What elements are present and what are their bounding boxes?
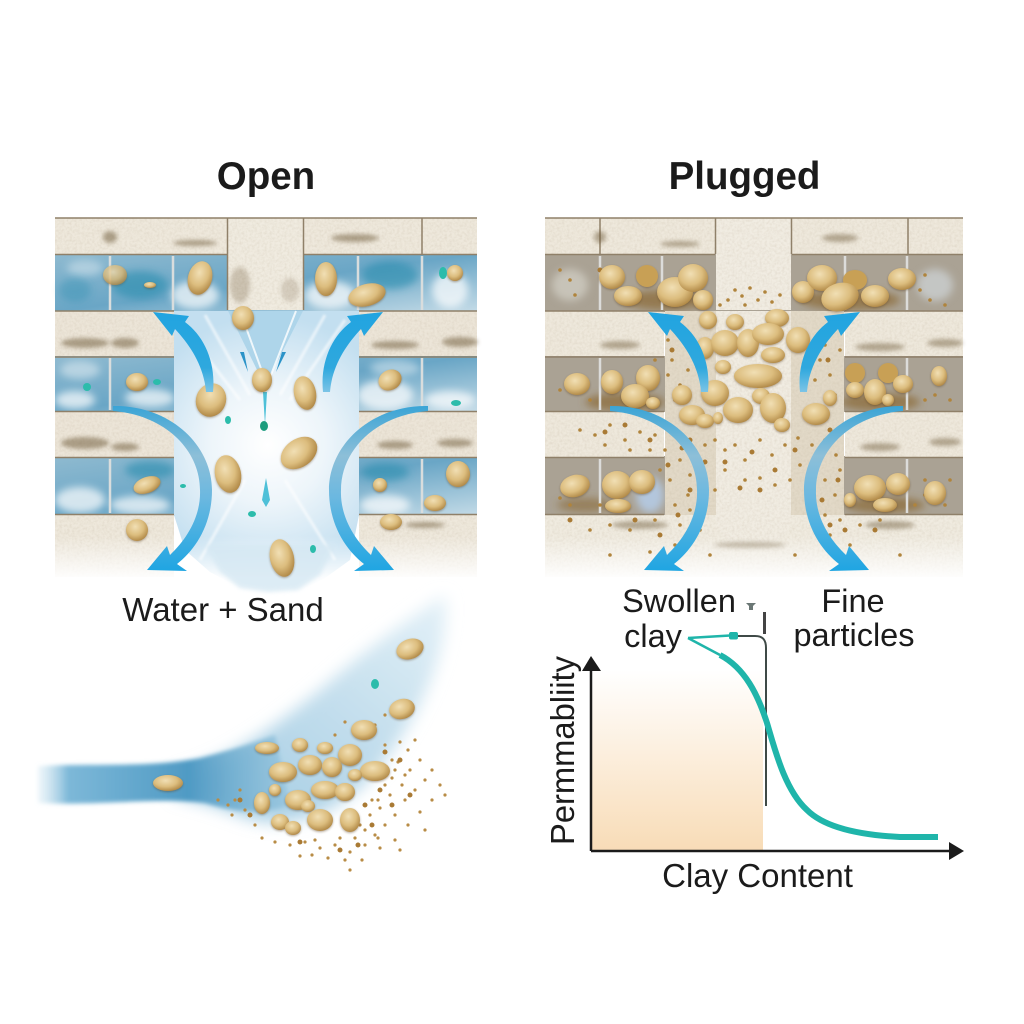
arrow: lower right flow: [804, 406, 903, 571]
arrow: upper left flow: [648, 312, 708, 392]
x axis label: Clay Content: [662, 857, 853, 894]
coarse sand spray: [240, 752, 410, 850]
arrow: upper right flow: [323, 312, 383, 392]
coarser particles: [570, 270, 875, 535]
title: Open: Open: [217, 155, 315, 198]
permeability curve: [720, 655, 938, 837]
bottom fade: [40, 536, 490, 592]
central flow streaks: [178, 311, 345, 560]
stone stains: [61, 231, 478, 528]
label: Fine particles: particles: [793, 617, 915, 653]
central open channel: [174, 311, 359, 592]
panel: open pore network: [40, 218, 490, 592]
label: Swollen clay: Swollen: [622, 583, 736, 619]
pore windows with water: [55, 254, 477, 516]
water stream: [38, 735, 290, 811]
axes: [591, 668, 950, 851]
label: Swollen clay: clay: [624, 618, 683, 654]
sand grains: [153, 635, 427, 835]
stone bricks: [55, 218, 477, 577]
arrow: lower left flow: [113, 406, 212, 571]
arrow: upper right flow: [800, 312, 860, 392]
teal mineral fragments: [83, 267, 461, 553]
stone bricks: [545, 218, 963, 577]
fine sand spray: [218, 715, 445, 870]
arrow: lower left flow: [610, 406, 709, 571]
title: Plugged: Plugged: [669, 155, 820, 198]
central plugged channel: [665, 311, 844, 515]
arrow: lower right flow: [329, 406, 428, 571]
label: Fine particles: Fine: [821, 583, 885, 619]
y axis label: Permmabliity: [544, 656, 581, 845]
teal fragment: [371, 679, 379, 689]
shaded low-clay region: [592, 670, 763, 850]
pale water at the channel outlet: [205, 545, 335, 592]
label: Water + Sand: Water + Sand: [122, 591, 324, 628]
arrow: upper left flow: [153, 312, 213, 392]
bottom fade: [535, 536, 975, 592]
threshold marker line: [730, 636, 766, 806]
small marker glyph: [746, 603, 756, 610]
chart: permeability vs clay content: [544, 603, 964, 894]
fine particles: [560, 270, 950, 562]
sand grains: [103, 258, 470, 579]
plugging sand grains: [558, 264, 947, 513]
clogged pore windows: [545, 254, 963, 516]
panel: plugged pore network: [535, 218, 975, 592]
pale water fan: [175, 595, 446, 822]
illustration: sand clogging a narrowing stream: [38, 595, 446, 870]
stone stains: [594, 231, 963, 548]
